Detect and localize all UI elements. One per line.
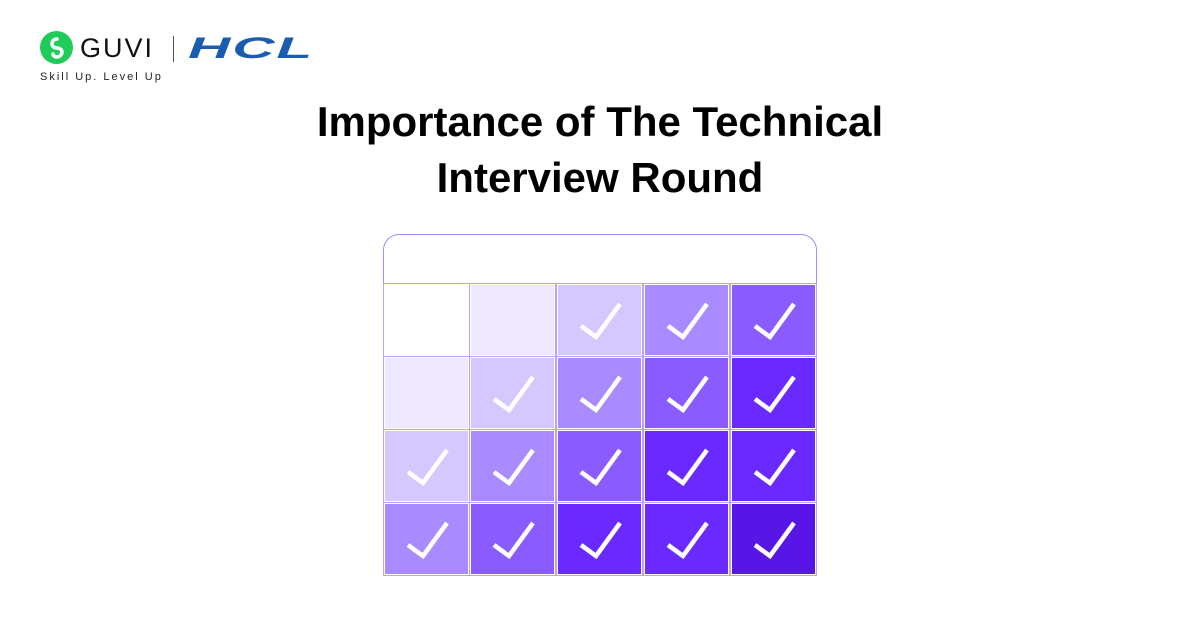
title: Interview Round [437, 154, 763, 201]
header [383, 234, 817, 284]
title [317, 98, 883, 201]
icon: guvi circle [40, 31, 73, 64]
cells [384, 284, 469, 356]
text: HCL: HCL [188, 32, 314, 65]
text: GUVI: GUVI [80, 33, 154, 63]
tagline: Skill Up. Level Up [40, 71, 163, 83]
logo [40, 31, 314, 83]
table grid [383, 234, 817, 576]
title: Importance of The Technical [317, 98, 883, 145]
